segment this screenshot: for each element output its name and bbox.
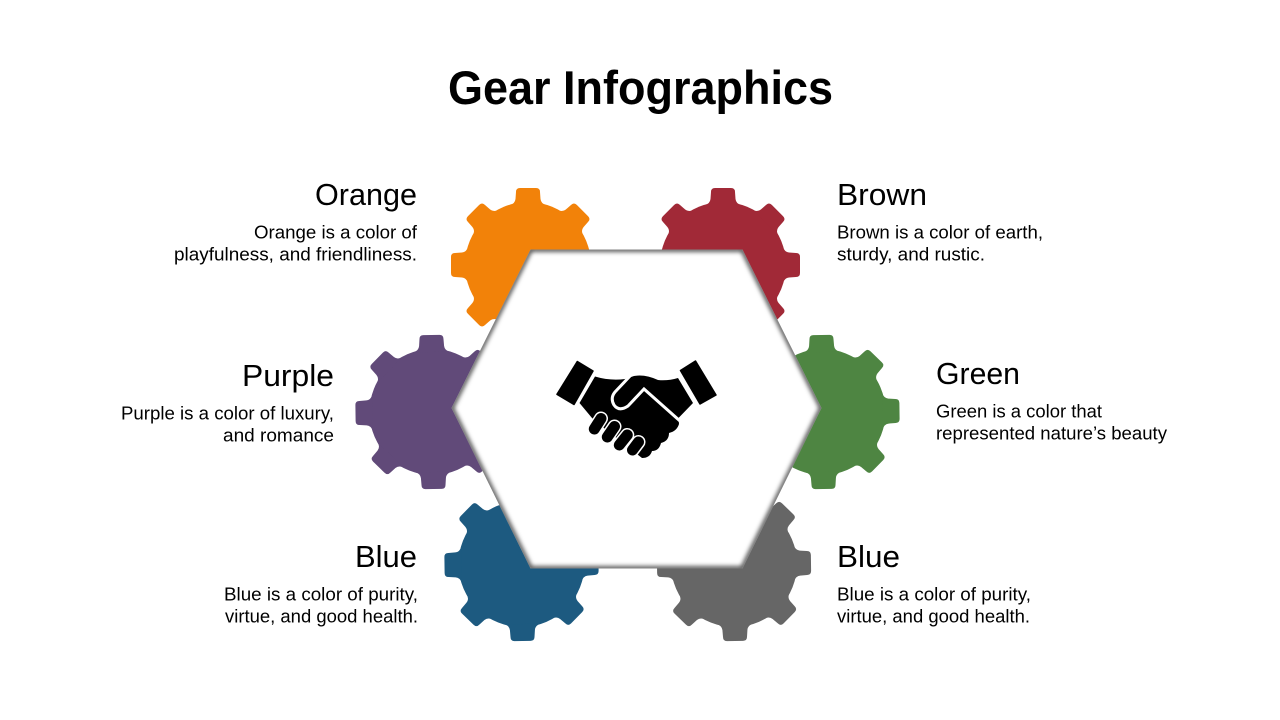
gear: orange — [451, 188, 605, 342]
label: Orange — [174, 177, 418, 265]
label: Blue right: Blue is a color of purity, — [837, 584, 1031, 604]
title: Gear Infographics — [448, 61, 833, 114]
gear: green — [744, 334, 901, 490]
label: Blue left: virtue, and good health. — [225, 607, 418, 627]
label: Blue left: Blue — [355, 539, 417, 574]
label: Brown — [837, 177, 1043, 265]
left cuff — [557, 362, 593, 404]
label: Brown: sturdy, and rustic. — [837, 245, 985, 265]
label: Purple: and romance — [223, 426, 334, 446]
label: Orange: playfulness, and friendliness. — [174, 245, 417, 265]
fingers — [594, 418, 638, 450]
label: Blue right: virtue, and good health. — [837, 607, 1030, 627]
label: Green — [936, 356, 1167, 444]
label: Blue right: Blue — [837, 539, 900, 574]
label: Brown: Brown — [837, 177, 927, 212]
gear: brown — [646, 188, 800, 342]
gear: gray — [656, 486, 812, 642]
label: Purple — [121, 358, 334, 446]
gear: purple — [354, 334, 511, 490]
label: Blue left — [224, 539, 418, 627]
icon: handshake — [557, 361, 716, 458]
hands — [580, 376, 693, 458]
right cuff — [680, 361, 716, 404]
label: Orange: Orange is a color of — [254, 222, 418, 242]
gear: dark blue — [443, 486, 600, 642]
label: Purple: Purple is a color of luxury, — [121, 404, 334, 424]
label: Blue left: Blue is a color of purity, — [224, 584, 418, 604]
label: Green: Green is a color that — [936, 402, 1102, 422]
label: Purple: Purple — [242, 358, 334, 393]
label: Brown: Brown is a color of earth, — [837, 222, 1043, 242]
label: Orange: Orange — [315, 177, 417, 212]
thumb outline — [612, 375, 680, 421]
central hexagon — [452, 250, 822, 568]
label: Blue right — [837, 539, 1031, 627]
label: Green: represented nature’s beauty — [936, 424, 1167, 444]
label: Green: Green — [936, 356, 1020, 391]
